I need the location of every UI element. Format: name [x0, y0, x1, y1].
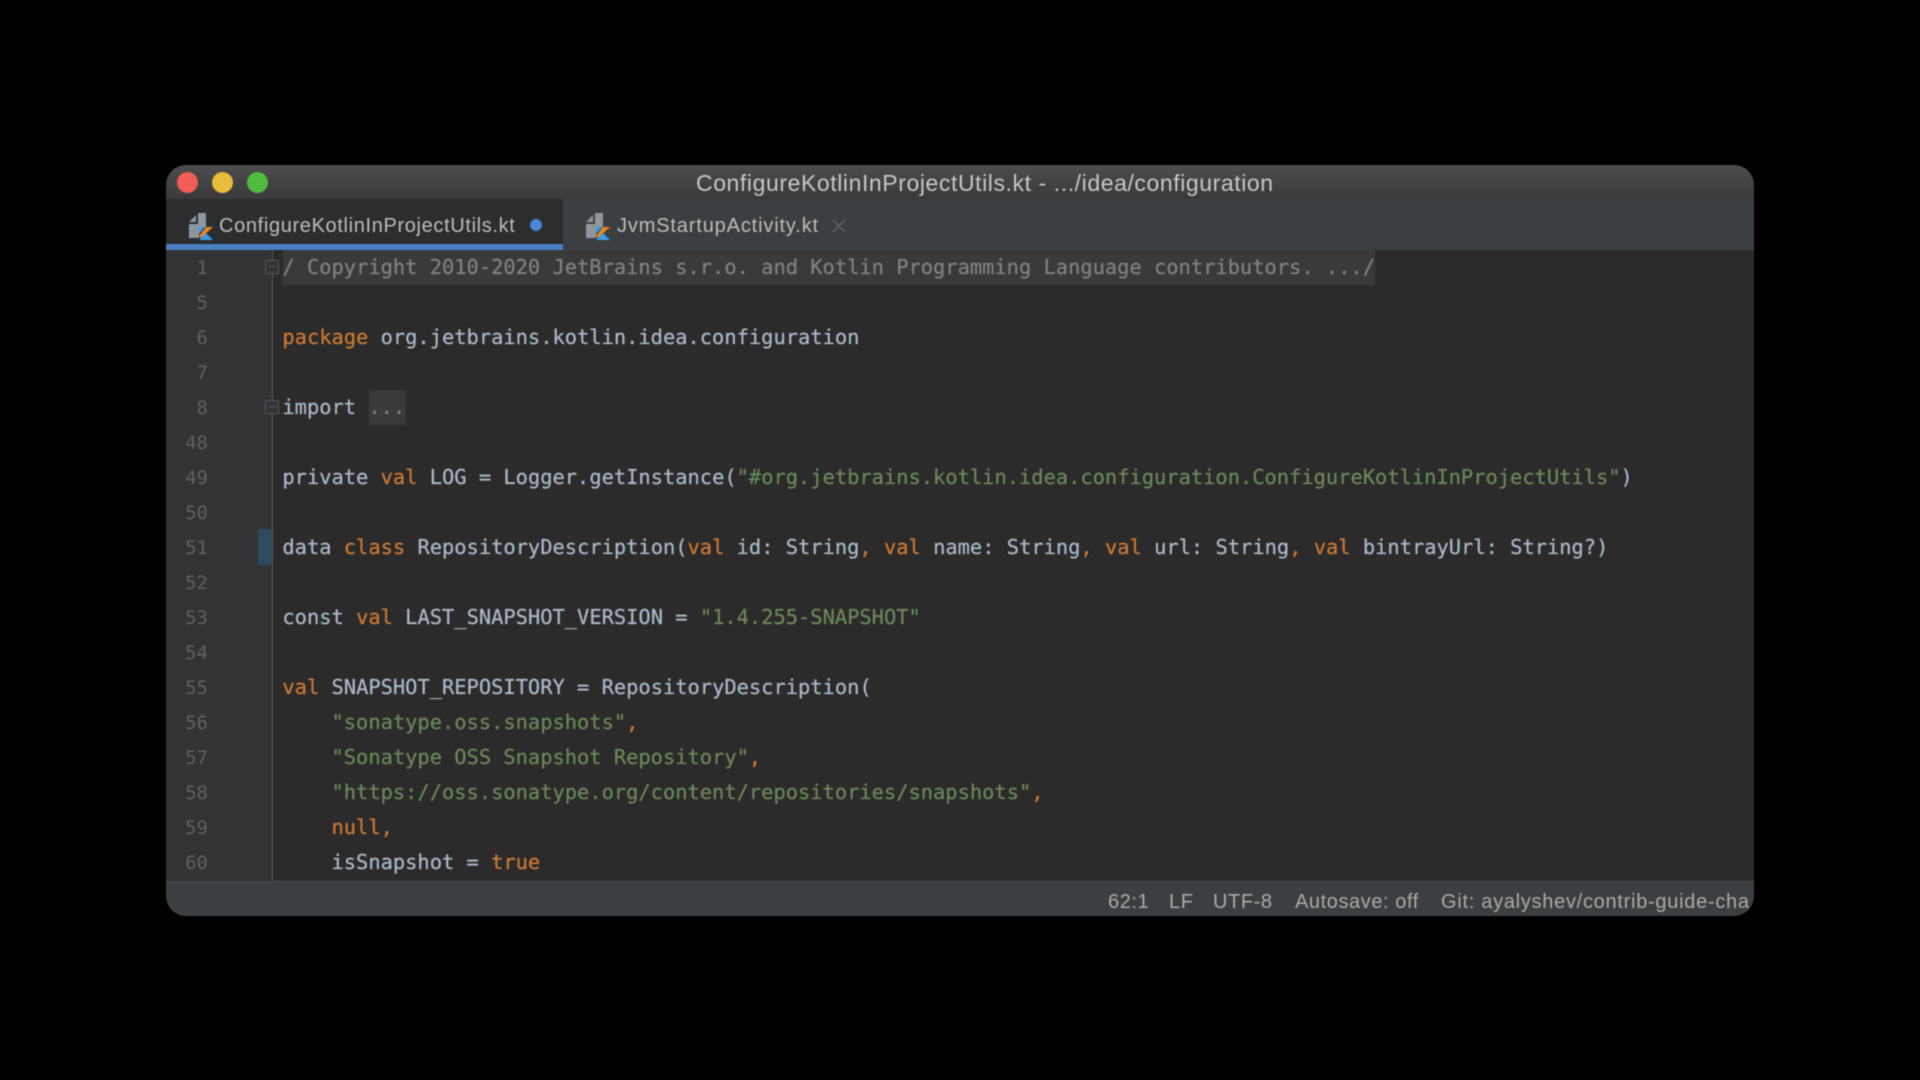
code text [282, 255, 1633, 874]
folded comment highlight [283, 250, 1375, 285]
code text: "sonatype.oss.snapshots", [332, 710, 638, 734]
code text: "Sonatype OSS Snapshot Repository", [332, 745, 761, 769]
line numbers: 55 [185, 677, 208, 699]
code text: private val LOG = Logger.getInstance("#org.jetbrains.kotlin.idea.configuration.ConfigureKotlinInProjectUtils") [282, 465, 1633, 489]
line numbers: 49 [185, 467, 208, 489]
minimize button [212, 172, 233, 192]
line numbers: 54 [185, 642, 208, 664]
line numbers: 5 [197, 292, 208, 314]
tab bar [166, 199, 1754, 250]
line numbers: 7 [197, 362, 208, 384]
line numbers: 50 [185, 502, 208, 524]
code text: package org.jetbrains.kotlin.idea.configuration [282, 325, 859, 349]
line numbers: 57 [185, 747, 208, 769]
code editor [185, 250, 1633, 874]
active tab label: ConfigureKotlinInProjectUtils.kt [219, 215, 515, 237]
blue tab underline [166, 244, 563, 250]
status line ending: LF [1169, 891, 1194, 913]
status encoding: UTF-8 [1213, 891, 1273, 913]
close x [832, 220, 846, 232]
line numbers: 52 [185, 572, 208, 594]
code text: isSnapshot = true [331, 850, 540, 874]
inactive tab label: JvmStartupActivity.kt [617, 215, 819, 237]
line numbers: 59 [185, 817, 208, 839]
status bar [166, 881, 1754, 916]
inactive tab [586, 212, 846, 241]
line numbers: 48 [185, 432, 208, 454]
fold marker [265, 260, 279, 274]
code text: const val LAST_SNAPSHOT_VERSION = "1.4.255-SNAPSHOT" [282, 605, 921, 629]
status autosave: Autosave: off [1295, 891, 1419, 913]
gutter [166, 250, 273, 881]
close button [177, 172, 198, 192]
line numbers: 6 [197, 327, 208, 349]
line numbers: 60 [185, 852, 208, 874]
active tab [166, 199, 563, 250]
icon: kotlin file [188, 212, 214, 241]
line numbers: 53 [185, 607, 208, 629]
window title: ConfigureKotlinInProjectUtils.kt - .../idea/configuration [696, 170, 1274, 196]
line numbers: 1 [197, 257, 208, 279]
line numbers: 58 [185, 782, 208, 804]
icon: kotlin file [586, 212, 610, 241]
title bar [166, 165, 1754, 199]
code text: "https://oss.sonatype.org/content/repositories/snapshots", [332, 780, 1044, 804]
code text: import ... [282, 395, 405, 419]
line numbers: 8 [197, 397, 208, 419]
line numbers [185, 257, 208, 874]
zoom button [247, 172, 268, 192]
change marker [258, 529, 272, 565]
folded imports highlight [369, 390, 406, 425]
code text: data class RepositoryDescription(val id: String, val name: String, val url: String, val bintrayUrl: String?) [282, 535, 1608, 559]
code text: val SNAPSHOT_REPOSITORY = RepositoryDescription( [282, 675, 872, 699]
line numbers: 51 [185, 537, 208, 559]
code text: null, [332, 815, 393, 839]
panel: editor window [166, 165, 1754, 916]
modified dot [530, 219, 542, 231]
line numbers: 56 [185, 712, 208, 734]
status position: 62:1 [1108, 891, 1149, 913]
code text: / Copyright 2010-2020 JetBrains s.r.o. and Kotlin Programming Language contributors. .../ [282, 255, 1375, 279]
fold marker [265, 400, 279, 414]
status git branch: Git: ayalyshev/contrib-guide-cha [1441, 891, 1750, 913]
